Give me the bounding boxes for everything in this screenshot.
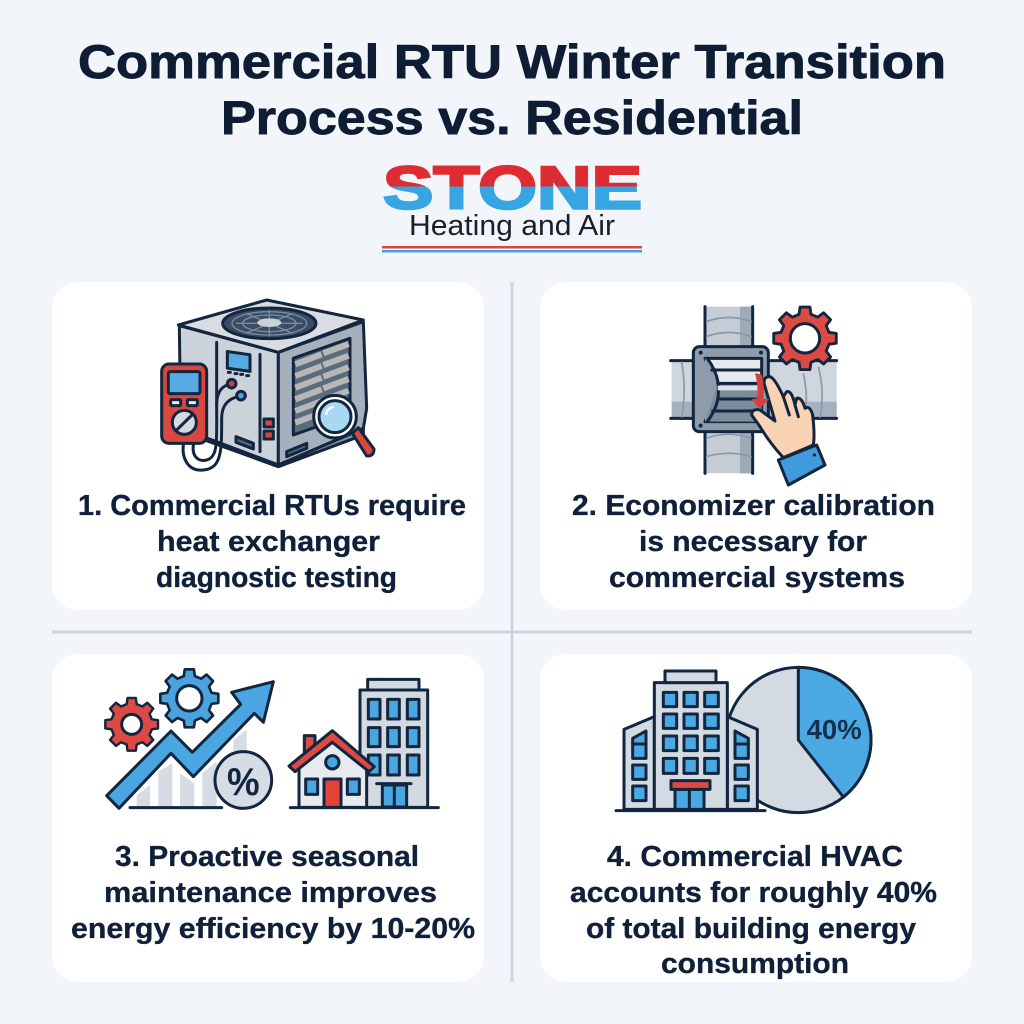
panel: proactive seasonal maintenance (52, 654, 484, 982)
heading: card 2: commercial systems (609, 562, 905, 594)
icon: office building with 40 percent pie chart: 40% (807, 714, 862, 745)
logo: Stone Heating and Air (382, 154, 642, 252)
heading: card 4: of total building energy (586, 913, 916, 945)
heading: card 4: consumption (661, 948, 849, 980)
title: Process vs. Residential (221, 91, 803, 144)
heading: card 4: 4. Commercial HVAC (607, 841, 903, 873)
heading: card 1 (78, 490, 466, 594)
panel: commercial HVAC energy share (540, 654, 972, 982)
heading: card 3: maintenance improves (104, 877, 437, 909)
icon: efficiency chart with gears, house and building (105, 669, 438, 808)
panel: heat exchanger diagnostic testing (52, 282, 484, 610)
heading: card 2: 2. Economizer calibration (572, 490, 935, 522)
icon: efficiency chart with gears, house and building: % (227, 760, 260, 804)
heading: card 2: is necessary for (639, 526, 867, 558)
heading: card 1: diagnostic testing (156, 562, 397, 594)
heading: card 2 (572, 490, 935, 594)
title (78, 35, 946, 144)
heading: card 3: energy efficiency by 10-20% (71, 913, 475, 945)
logo: Stone Heating and Air: Heating and Air (409, 210, 615, 242)
heading: card 4 (570, 841, 937, 980)
heading: card 3: 3. Proactive seasonal (115, 841, 419, 873)
heading: card 1: 1. Commercial RTUs require (78, 490, 466, 522)
heading: card 1: heat exchanger (157, 526, 380, 558)
heading: card 3 (71, 841, 475, 945)
panel: economizer calibration (540, 282, 972, 610)
icon: office building with 40 percent pie chart (616, 667, 871, 813)
icon: economizer damper, gear and hand (671, 307, 837, 485)
heading: card 4: accounts for roughly 40% (570, 877, 937, 909)
title: Commercial RTU Winter Transition (78, 35, 946, 88)
icon: rooftop unit with multimeter and magnifier (162, 300, 374, 470)
logo: Stone Heating and Air: STONE (383, 154, 642, 222)
